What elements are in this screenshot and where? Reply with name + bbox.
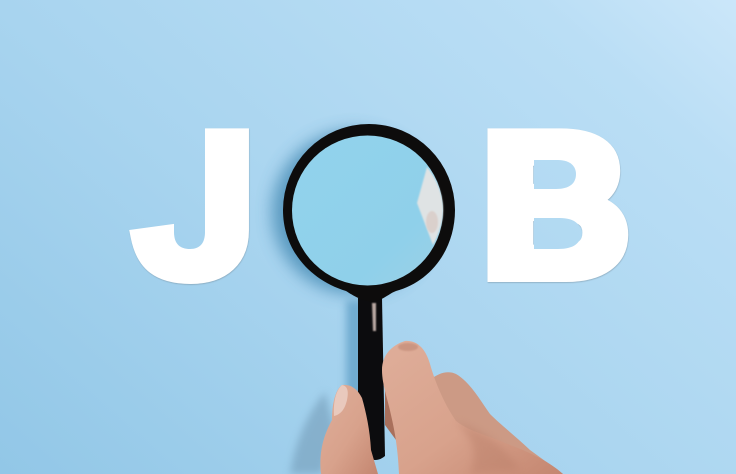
lens ring (283, 124, 455, 302)
magnifying glass (283, 124, 455, 460)
index finger and back of hand (382, 341, 563, 474)
reflection tint (426, 211, 438, 233)
back knuckle finger (420, 372, 563, 474)
handle highlight (372, 303, 376, 331)
thumbnail (334, 385, 348, 416)
finger tip shading (398, 343, 418, 351)
thumb shadow (290, 392, 335, 474)
lens reflection (417, 167, 443, 245)
J hook inner curve (174, 214, 205, 249)
magnifying glass shadow (272, 130, 436, 450)
lens (292, 136, 443, 286)
knuckle shading (455, 421, 520, 474)
B upper counter (534, 160, 576, 189)
hand (290, 341, 563, 474)
thumb (320, 385, 378, 474)
B lower counter (534, 218, 581, 249)
handle (358, 298, 385, 460)
letter J: J (136, 93, 255, 316)
middle finger behind handle (385, 385, 396, 440)
letter B: B (482, 93, 629, 317)
